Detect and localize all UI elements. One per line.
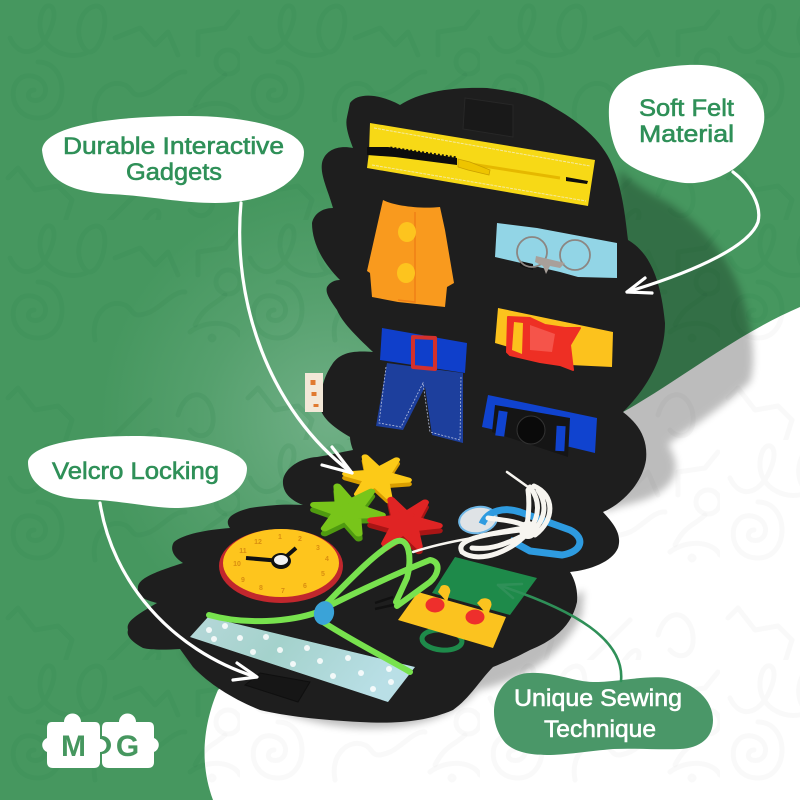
clock numbers: 6: [303, 583, 307, 590]
orange felt shirt: [367, 200, 454, 307]
buckle slot: [512, 322, 523, 354]
yellow strap with red buckle: [495, 308, 613, 370]
green felt panel: [432, 557, 537, 615]
clock hands: [246, 548, 296, 561]
clock hub: [274, 555, 288, 565]
clock numbers: 2: [298, 536, 302, 543]
black buckle: [492, 405, 570, 457]
board shadow: [180, 170, 753, 728]
red snap button: [426, 598, 444, 612]
clock numbers: [233, 534, 329, 595]
callout: durable interactive gadgets: [42, 116, 304, 203]
zipper slider: [458, 159, 490, 175]
bubble text: Velcro Locking: [52, 458, 219, 485]
arrow: to felt: [627, 172, 759, 293]
bubble: [42, 116, 304, 203]
clock numbers: 5: [321, 571, 325, 578]
blue strap with black buckle: [482, 395, 597, 457]
blue lacing buckle: [413, 472, 580, 557]
pants stitching: [379, 367, 461, 440]
toy gears: [308, 455, 442, 553]
zipper end gap: [566, 177, 588, 184]
clock numbers: 10: [233, 561, 241, 568]
clock numbers: 9: [241, 577, 245, 584]
red belt loop: [413, 337, 435, 369]
lower velcro strip: [245, 673, 310, 702]
arrow: to velcro strip: [100, 503, 257, 680]
blue belt: [380, 328, 467, 373]
shirt placket: [398, 212, 415, 302]
bubble: [28, 436, 247, 508]
buckle slot: [555, 426, 566, 451]
blue strap: [482, 395, 597, 453]
left ring: [517, 237, 547, 267]
red snap button: [466, 610, 484, 624]
green drawstring: [209, 541, 438, 672]
bubble text: Unique Sewing: [514, 685, 682, 712]
letter G: G: [116, 730, 139, 763]
green felt ring: [421, 628, 463, 652]
zipper opening: [367, 147, 457, 165]
bubble text: Soft Felt: [639, 95, 734, 122]
right ring: [560, 240, 590, 270]
zipper: [367, 123, 595, 206]
red buckle: [507, 317, 580, 370]
zipper teeth: [390, 150, 457, 160]
pouch fabric: [190, 617, 415, 702]
callout: unique sewing technique: [494, 673, 713, 755]
tag paper: [305, 373, 323, 412]
strap gap: [520, 261, 533, 270]
white disc: [457, 504, 499, 536]
pants legs: [376, 363, 463, 443]
bubble: [609, 65, 764, 183]
logo: MG puzzle pieces: [42, 714, 159, 768]
pouch dots: [206, 623, 394, 692]
left puzzle piece: [42, 714, 107, 768]
clock red rim: [219, 529, 343, 603]
blue loop: [482, 510, 580, 555]
bubble text: Durable Interactive: [63, 133, 284, 160]
bubble text second line: Gadgets: [126, 159, 222, 186]
dotted pouch with drawstring: [190, 541, 438, 702]
clock face: [223, 529, 339, 597]
zipper closed teeth: [458, 162, 560, 178]
yellow tab left: [438, 585, 450, 602]
shirt button: [398, 222, 416, 242]
yellow felt flap: [398, 592, 506, 648]
zipper stitching: [372, 128, 590, 201]
shirt body: [367, 200, 454, 307]
white shoelace: [413, 472, 550, 557]
arrow: to sewing: [498, 584, 621, 681]
clock numbers: 3: [316, 545, 320, 552]
blue felt pants: [376, 328, 467, 443]
blue strap: [495, 223, 617, 278]
yellow strap: [495, 308, 613, 367]
clock numbers: 8: [259, 585, 263, 592]
clock numbers: 4: [325, 556, 329, 563]
blue cord lock bead: [311, 599, 337, 627]
callout: soft felt material: [609, 65, 764, 183]
letter M: M: [61, 730, 86, 763]
zipper tape: [367, 123, 595, 206]
light blue strap with clasp: [495, 223, 617, 278]
arrow: to gears: [240, 203, 352, 473]
bubble: [494, 673, 713, 755]
callout: velcro locking: [28, 436, 247, 508]
buckle slot: [495, 411, 508, 437]
bubble text second line: Material: [639, 121, 734, 148]
bubble text second line: Technique: [544, 716, 656, 743]
green felt pocket: [398, 557, 537, 652]
yellow gear: [342, 455, 412, 503]
yellow tab right: [477, 598, 492, 616]
red gear: [368, 498, 442, 553]
yellow felt clock: [219, 529, 343, 603]
white area squiggle pattern: [205, 314, 784, 768]
shirt button: [397, 263, 415, 283]
buckle round button: [517, 416, 545, 444]
top velcro patch: [463, 98, 513, 137]
clasp rings: [517, 237, 590, 270]
clock numbers: 12: [254, 539, 262, 546]
buckle highlight: [530, 325, 555, 352]
clock numbers: 11: [239, 548, 247, 555]
tag logo dots: [313, 380, 316, 407]
metal clasp: [535, 256, 565, 274]
black cord tip: [375, 597, 393, 609]
clock numbers: 7: [281, 588, 285, 595]
clock center: [271, 553, 291, 569]
white background shape: [205, 307, 800, 800]
felt busy board: [128, 88, 665, 723]
board felt body: [128, 88, 665, 723]
green gear: [308, 484, 388, 541]
brand tag: [305, 373, 323, 412]
right puzzle piece: [102, 714, 159, 768]
clock numbers: 1: [278, 534, 282, 541]
